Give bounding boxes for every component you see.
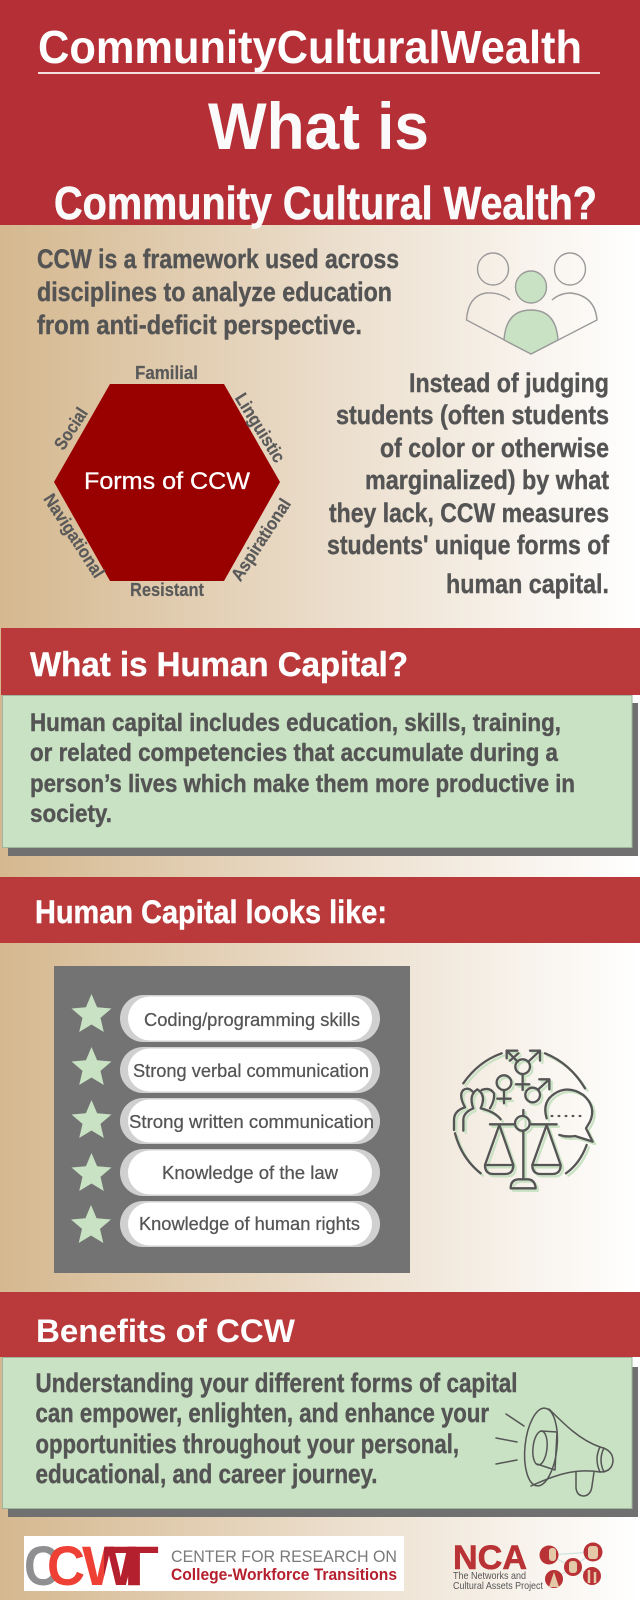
network graphic of circles bbox=[540, 1542, 602, 1588]
body text: benefits bbox=[36, 1368, 518, 1489]
body text: benefits: educational, and career journey. bbox=[36, 1459, 378, 1489]
logo mark: CCWT letters bbox=[26, 1546, 158, 1586]
hexagon side labels: Social bbox=[50, 404, 92, 453]
body text: benefits: can empower, enlighten, and enhance your bbox=[36, 1398, 489, 1428]
banner: human capital looks like bbox=[0, 877, 640, 943]
hexagon side labels: Linguistic bbox=[231, 389, 289, 466]
logo mark: CCWT letters: W bbox=[82, 1534, 136, 1597]
list item: knowledge of the law bbox=[72, 1149, 380, 1196]
icon: group of people bbox=[466, 253, 597, 354]
icon: megaphone bbox=[496, 1407, 613, 1496]
logo text: college-workforce transitions: College-Workforce Transitions bbox=[171, 1565, 397, 1584]
hexagon side labels bbox=[40, 363, 295, 600]
list item: verbal communication bbox=[72, 1047, 380, 1093]
intro text bbox=[37, 244, 399, 340]
explanatory text: right aligned: Instead of judging bbox=[409, 368, 609, 398]
label: Forms of CCW: Forms of CCW bbox=[84, 468, 250, 495]
body text: human capital definition: society. bbox=[30, 800, 112, 828]
body text: human capital definition bbox=[30, 709, 575, 828]
explanatory text: right aligned: human capital. bbox=[446, 569, 609, 599]
banner: human capital looks like: Human Capital looks like: bbox=[35, 894, 387, 930]
heading: What is Human Capital?: What is Human Capital? bbox=[30, 646, 408, 684]
intro text: from anti-deficit perspective. bbox=[37, 310, 362, 340]
list item: knowledge of human rights: Knowledge of human rights bbox=[139, 1214, 360, 1234]
logo mark: CCWT letters: T bbox=[109, 1534, 159, 1597]
logo: NCA networks and cultural assets project: Cultural Assets Project bbox=[453, 1580, 543, 1592]
hexagon side labels: Aspirational bbox=[227, 495, 295, 585]
panel: benefits of CCW bbox=[0, 1292, 640, 1517]
logo: CCWT center for research bbox=[24, 1536, 404, 1591]
list item: written communication: Strong written communication bbox=[129, 1112, 374, 1132]
panel: list of skills bbox=[54, 966, 410, 1273]
logo mark: CCWT letters: W bbox=[82, 1534, 136, 1597]
icon: justice scales, gender symbols, people and speech bubble bbox=[454, 1051, 595, 1191]
title: Community Cultural Wealth wordmark: CommunityCulturalWealth bbox=[38, 21, 582, 73]
hexagon: forms of CCW bbox=[40, 363, 295, 600]
intro text: disciplines to analyze education bbox=[37, 277, 392, 307]
body text: benefits: Understanding your different forms of capital bbox=[36, 1368, 518, 1398]
logo: NCA networks and cultural assets project: NCA bbox=[453, 1539, 527, 1577]
list item: written communication bbox=[72, 1098, 380, 1144]
logo: NCA networks and cultural assets project: The Networks and bbox=[453, 1570, 526, 1582]
body text: human capital definition: person’s lives which make them more productive in bbox=[30, 770, 575, 798]
explanatory text: right aligned: of color or otherwise bbox=[380, 433, 609, 463]
hexagon side labels: Familial bbox=[135, 363, 198, 383]
list item: coding: Coding/programming skills bbox=[144, 1010, 360, 1030]
list item: verbal communication: Strong verbal communication bbox=[133, 1061, 369, 1081]
intro text: CCW is a framework used across bbox=[37, 244, 399, 274]
list item: knowledge of the law: Knowledge of the law bbox=[162, 1163, 339, 1183]
header banner bbox=[0, 0, 640, 229]
hexagon side labels: Resistant bbox=[130, 580, 204, 600]
logo mark: CCWT letters: C bbox=[47, 1534, 85, 1597]
logo mark: CCWT letters: C bbox=[24, 1534, 60, 1597]
list item: coding bbox=[72, 994, 380, 1042]
panel: what is human capital bbox=[1, 628, 640, 856]
body text: human capital definition: Human capital includes education, skills, training, bbox=[30, 709, 561, 737]
explanatory text: right aligned bbox=[327, 368, 610, 599]
body text: human capital definition: or related competencies that accumulate during a bbox=[30, 739, 559, 767]
explanatory text: right aligned: marginalized) by what bbox=[365, 465, 609, 495]
heading: Benefits of CCW: Benefits of CCW bbox=[36, 1313, 296, 1349]
hexagon side labels: Navigational bbox=[40, 490, 109, 581]
heading: What is: What is bbox=[208, 89, 429, 163]
body text: benefits: opportunities throughout your personal, bbox=[36, 1429, 459, 1459]
logo: NCA networks and cultural assets project bbox=[453, 1539, 602, 1592]
list item: knowledge of human rights bbox=[71, 1201, 380, 1247]
logo text: center for research on: CENTER FOR RESEARCH ON bbox=[171, 1547, 397, 1566]
